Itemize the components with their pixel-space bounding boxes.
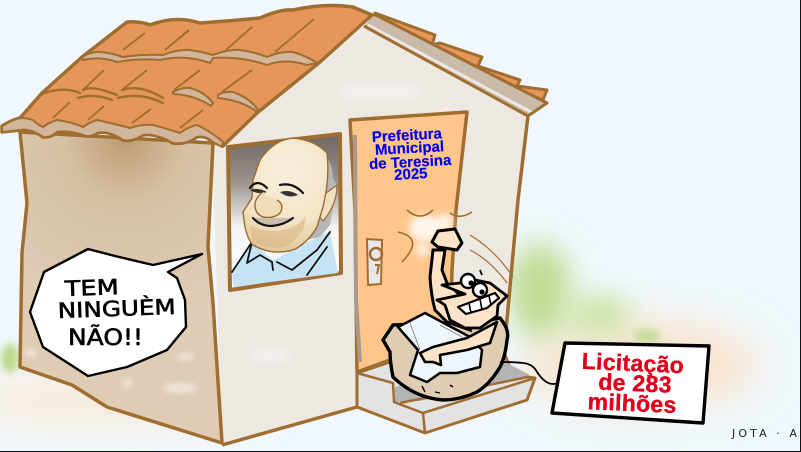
shirt [232,231,338,287]
brows and eyes [250,183,303,193]
arm up [430,250,470,330]
side wall [20,132,222,443]
door lock [367,239,382,285]
back roof tiles [375,13,547,100]
gable trim [364,14,547,116]
wall smudges [25,348,197,394]
front wall [212,25,528,445]
wall highlight [250,85,420,360]
motion lines [470,235,513,283]
arm over paper [420,322,497,365]
character in sack [383,229,508,400]
speech text: TEM [63,275,119,301]
face [243,138,328,252]
head [437,278,507,328]
speech text: NINGUÈM [57,294,176,323]
steps [357,350,535,433]
door text: de Teresina [369,152,452,173]
nose [255,192,282,218]
speech text [57,275,176,351]
shading [250,215,306,248]
mouth teeth [458,293,499,314]
house [2,6,547,445]
roof [2,6,372,147]
door text: Prefeitura [371,125,443,146]
paper [398,313,482,382]
door knock marks [409,214,453,256]
signature: JOTA · A [731,427,797,440]
eyes [461,274,475,288]
door [350,112,472,372]
roof tile bands [2,50,317,147]
speech text: NÃO!! [68,324,143,351]
sign text: Licitação [581,348,685,378]
smile [253,218,293,226]
door text: 2025 [394,165,428,184]
sign text: milhões [587,388,677,418]
house outline front [222,116,528,445]
hair and ear [306,148,337,240]
string to sign [500,362,565,384]
sack [383,318,508,400]
sign text [579,348,685,418]
window [228,134,341,290]
sack stitches [422,385,453,393]
sign [552,343,709,423]
sign text: de 283 [598,369,672,398]
fist [432,229,462,250]
door text: Municipal [375,138,444,159]
speech bubble [30,249,202,376]
door text [367,125,453,185]
